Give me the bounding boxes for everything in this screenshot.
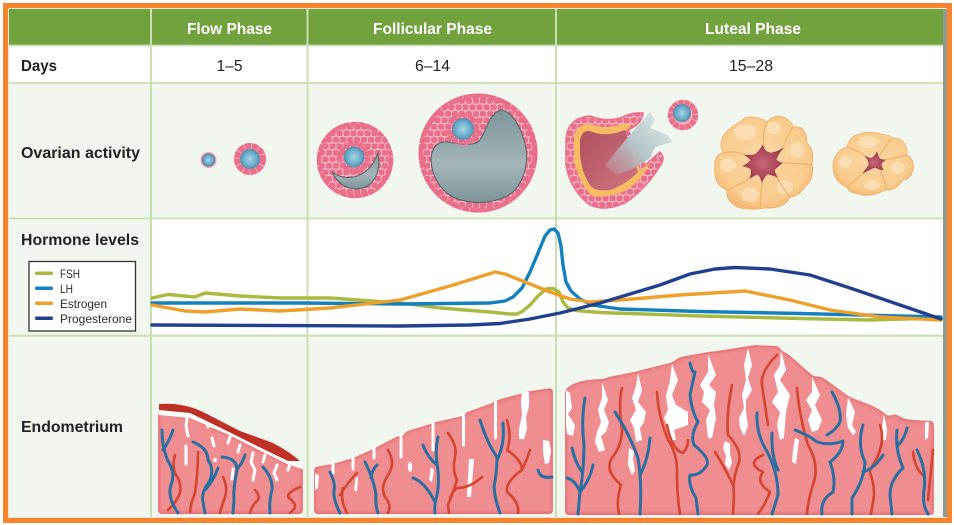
endometrium: luteal phase (566, 346, 933, 514)
luteal white glands (566, 348, 929, 475)
heading: Flow Phase: Flow Phase (187, 21, 272, 38)
endometrium illustrations (159, 346, 933, 514)
days value: 1–5: 1–5 (216, 58, 243, 75)
legend: Progesterone: Progesterone (60, 312, 132, 326)
line: LH (152, 229, 941, 317)
legend: LH: LH (60, 282, 73, 296)
icon: regressing corpus luteum (833, 132, 913, 195)
row label: Ovarian activity: Ovarian activity (21, 145, 140, 162)
days value: 15–28: 15–28 (729, 58, 773, 75)
legend (29, 262, 136, 331)
line: Progesterone (152, 268, 941, 326)
icon: corpus luteum (714, 116, 813, 209)
follicular phase vessels (330, 420, 552, 513)
legend: Estrogen: Estrogen (60, 297, 107, 311)
ovarian activity illustrations (200, 94, 913, 212)
icon: ovulating follicle (566, 112, 672, 208)
flow phase vessels (162, 430, 300, 513)
line: Estrogen (152, 272, 941, 320)
icon: secondary follicle (317, 122, 393, 198)
icon: primordial follicle (200, 152, 216, 168)
hormone line chart (152, 229, 941, 326)
heading: Follicular Phase: Follicular Phase (373, 21, 492, 38)
endometrium: follicular phase (315, 389, 552, 513)
icon: released ovum (668, 100, 698, 130)
follicular white glands (315, 392, 551, 497)
icon: mature follicle (418, 94, 538, 212)
endometrium: flow phase (159, 404, 302, 513)
heading: Luteal Phase: Luteal Phase (705, 21, 801, 38)
icon: primary follicle (234, 143, 266, 175)
days value: 6–14: 6–14 (415, 58, 450, 75)
row label: Endometrium: Endometrium (21, 419, 123, 436)
luteal phase vessels (567, 355, 933, 514)
shedding white glands (159, 411, 302, 480)
row label: Days: Days (21, 58, 57, 75)
legend: FSH: FSH (60, 267, 80, 281)
line: FSH (152, 288, 941, 320)
row label: Hormone levels: Hormone levels (21, 232, 139, 249)
